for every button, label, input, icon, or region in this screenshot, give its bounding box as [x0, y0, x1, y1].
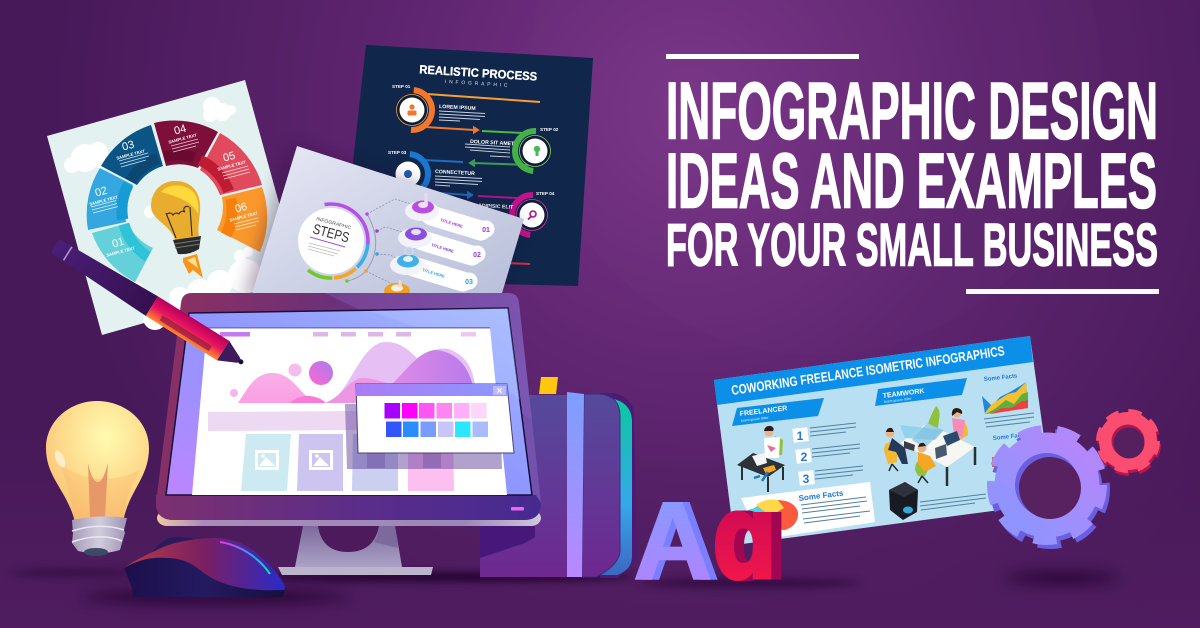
coworking team illustration: [884, 406, 975, 486]
Aa letters: ɑ: [712, 468, 778, 606]
segment 06: 06: [234, 201, 249, 215]
step pill 03: [390, 247, 478, 294]
monitor: [156, 293, 541, 575]
image tile 1: [241, 434, 291, 491]
card: coworking freelance isometric infographics: [714, 336, 1053, 545]
Aa letters: ɑ: [717, 468, 783, 606]
segment 05: [200, 133, 262, 195]
text under team: [920, 494, 986, 510]
stylus pen: [49, 236, 249, 373]
image tile 2: [297, 434, 343, 491]
segment 05: SAMPLE TEXT: [217, 159, 247, 172]
light bulb with rocket flame: [151, 181, 203, 278]
segment 02: [87, 168, 133, 230]
server cube: [889, 482, 918, 520]
step pill 03: TITLE HERE: [422, 267, 446, 279]
book: [480, 377, 637, 578]
numbered list: 1: [797, 429, 804, 443]
card: infographic steps: [244, 146, 524, 300]
segment 04: [154, 121, 218, 168]
card heading: COWORKING FREELANCE ISOMETRIC INFOGRAPHICS: [730, 343, 1006, 398]
step 02: [465, 127, 559, 173]
page navigation: [220, 332, 476, 336]
step 02: DOLOR SIT AMET: [470, 139, 515, 147]
monitor stand: [278, 526, 433, 575]
steps circle: STEPS: [311, 220, 351, 245]
Aa letters: A: [640, 480, 719, 603]
segment 05: 05: [222, 150, 237, 164]
palette swatches: [384, 403, 488, 437]
segment 04: SAMPLE TEXT: [168, 132, 198, 145]
connector arrows: [423, 94, 540, 264]
step pill 02: TITLE HERE: [431, 242, 455, 254]
computer mouse: [124, 537, 285, 598]
light bulb: [46, 401, 149, 556]
large lavender gear: [992, 430, 1105, 544]
numbered list: 3: [803, 472, 810, 486]
steps circle: [279, 189, 383, 293]
ribbon: freelancer: FREELANCER: [739, 405, 788, 418]
step 01: STEP 01: [392, 84, 411, 89]
segment 01: SAMPLE TEXT: [106, 245, 136, 258]
ribbon: freelancer: [732, 398, 824, 426]
segment 03: [101, 125, 163, 185]
clouds: [64, 97, 262, 330]
step 02: STEP 02: [540, 127, 559, 132]
segment 06: [217, 187, 267, 252]
step pill 02: [398, 228, 486, 268]
web page layout: [192, 327, 507, 495]
segment 03: 03: [121, 139, 136, 153]
monitor bezel: [156, 293, 541, 520]
bookmark: [539, 377, 558, 394]
segment 06: SAMPLE TEXT: [229, 210, 259, 223]
ribbon: teamwork: lorem ipsum dolor: [884, 397, 913, 404]
ribbon: teamwork: [875, 378, 967, 406]
colour palette popup: [356, 384, 514, 453]
step pill 01: [405, 193, 494, 243]
Aa letters: A: [633, 480, 712, 603]
connecting dots and curve: [345, 199, 415, 285]
step 03: CONNECTETUR: [435, 169, 475, 177]
step 04: ADIPISIC ELIT: [478, 203, 514, 211]
segment 03: SAMPLE TEXT: [116, 148, 146, 161]
step pill 03: 03: [465, 279, 473, 286]
step 04: STEP 04: [536, 191, 555, 196]
area chart and facts: Some Facts: [984, 373, 1018, 383]
area chart hills: [230, 342, 476, 403]
step 03: [386, 150, 482, 196]
step 03: STEP 03: [388, 150, 407, 155]
numbered list: 2: [801, 450, 808, 464]
content bar: [208, 411, 360, 431]
top rule: [666, 54, 859, 59]
ribbon: teamwork: TEAMWORK: [882, 388, 925, 400]
step 01: LOREM IPSUM: [439, 104, 476, 112]
area chart and facts: Some Facts: [993, 432, 1027, 442]
image tile 3: [352, 434, 398, 491]
card: six-step light bulb wheel: [47, 80, 300, 335]
some facts box with pie chart: [741, 482, 875, 540]
Aa letters: [633, 468, 788, 606]
segment 02: 02: [94, 185, 109, 199]
freelancer figure at desk: [737, 426, 785, 492]
step platform 04: [384, 280, 410, 299]
segment 02: SAMPLE TEXT: [89, 194, 119, 207]
monitor screen: [166, 308, 532, 495]
card: realistic process infographic: [340, 45, 593, 286]
area chart and facts: [982, 373, 1046, 500]
step pill 02: 02: [473, 252, 481, 259]
segment 04: 04: [173, 123, 188, 137]
image tile 4: [408, 434, 454, 491]
segment 01: [92, 223, 153, 282]
step pill 01: 01: [482, 227, 490, 234]
segment 01: 01: [111, 236, 126, 250]
monitor lip: [157, 510, 541, 526]
floor shadows: [10, 569, 1118, 604]
popup shadow: [345, 404, 502, 469]
ribbon: freelancer: lorem ipsum dolor: [741, 416, 770, 423]
card heading: INFOGRAPHIC: [445, 79, 510, 89]
step 04: [478, 191, 555, 237]
some facts box with pie chart: Some Facts: [798, 489, 844, 503]
Aa letters: ɑ: [722, 468, 788, 606]
title: [666, 66, 1158, 278]
small pink gear: [1100, 412, 1158, 472]
card heading: REALISTIC PROCESS: [419, 62, 538, 84]
bottom rule: [966, 289, 1159, 294]
step 01: [390, 84, 485, 132]
steps circle: INFOGRAPHIC: [315, 216, 352, 231]
numbered list: [792, 423, 863, 486]
step pill 01: TITLE HERE: [440, 217, 464, 229]
bulb screw base: [72, 516, 127, 556]
colour palette popup: ×: [497, 386, 503, 397]
